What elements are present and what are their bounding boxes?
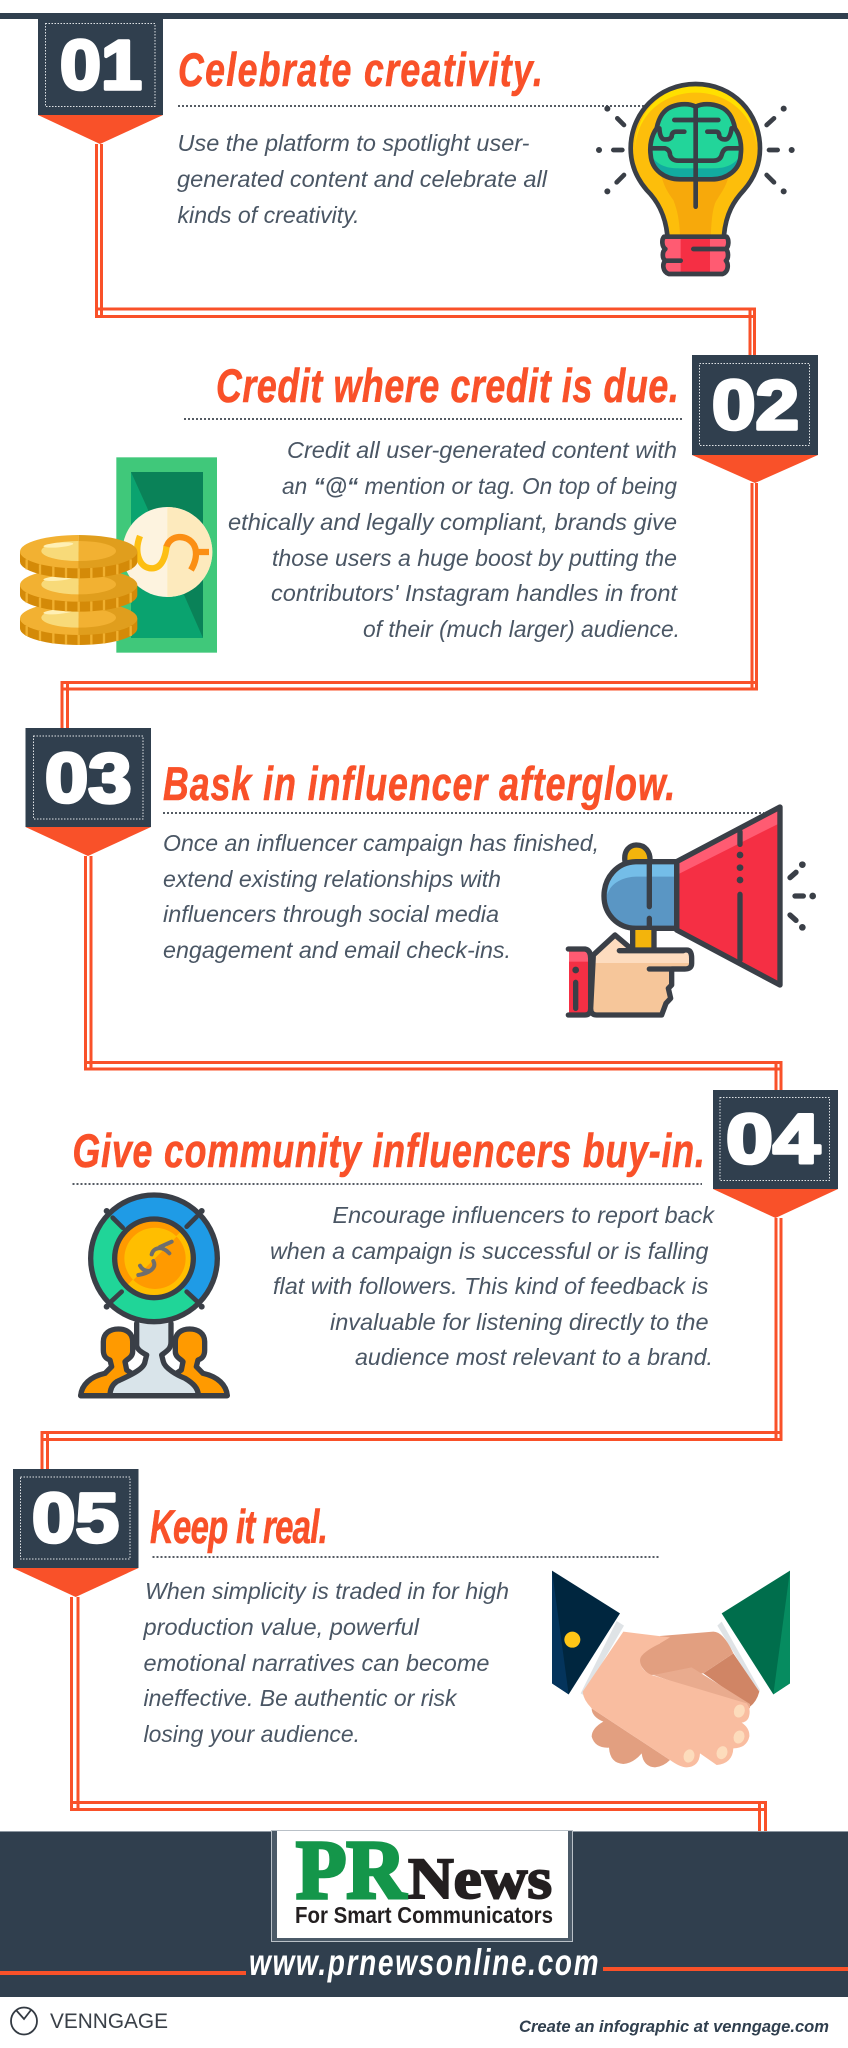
venngage logo <box>11 2008 168 2034</box>
heading: Celebrate creativity. <box>178 43 543 96</box>
number badge 03: 03 <box>45 739 132 817</box>
body text <box>177 130 548 228</box>
number badge 01 <box>38 19 163 144</box>
body text: influencers through social media <box>163 901 499 927</box>
number badge 02 <box>692 355 818 483</box>
logo: PR News: For Smart Communicators <box>295 1902 553 1928</box>
icon: light bulb with brain <box>599 84 792 274</box>
number badge 05 <box>13 1469 138 1597</box>
venngage credit: Create an infographic at venngage.com <box>519 2018 829 2036</box>
number badge 03 <box>26 728 151 856</box>
body text: kinds of creativity. <box>178 202 360 228</box>
body text: Once an influencer campaign has finished, <box>163 830 599 856</box>
logo: PR News: News <box>408 1846 552 1911</box>
body text: an “@“ mention or tag. On top of being <box>282 473 677 499</box>
body text: contributors' Instagram handles in front <box>271 580 679 606</box>
heading: Bask in influencer afterglow. <box>163 757 675 810</box>
body text <box>270 1202 716 1370</box>
body text <box>142 1578 509 1747</box>
body text: audience most relevant to a brand. <box>355 1344 713 1370</box>
number badge 04: 04 <box>726 1100 820 1178</box>
body text: Encourage influencers to report back <box>332 1202 716 1228</box>
icon: megaphone in hand <box>568 807 813 1015</box>
number badge 04 <box>713 1090 838 1218</box>
body text: when a campaign is successful or is falling <box>270 1238 709 1264</box>
body text: flat with followers. This kind of feedback is <box>273 1273 709 1299</box>
body text <box>163 830 599 963</box>
body text: generated content and celebrate all <box>177 166 548 192</box>
connector: step 5 to footer <box>70 1597 767 1831</box>
heading: Credit where credit is due. <box>216 359 679 412</box>
logo: PR News <box>272 1824 572 1942</box>
body text: When simplicity is traded in for high <box>145 1578 509 1604</box>
body text: invaluable for listening directly to the <box>330 1309 708 1335</box>
header bar <box>0 13 848 19</box>
panel: step 4 give community influencers buy-in <box>72 1090 838 1396</box>
heading: Keep it real. <box>150 1500 328 1553</box>
body text: those users a huge boost by putting the <box>272 545 677 571</box>
connector: step 1 to step 2 <box>95 144 756 355</box>
footer band <box>0 1824 848 1997</box>
connector: step 4 to step 5 <box>40 1218 782 1469</box>
body text <box>228 437 680 642</box>
number badge 05: 05 <box>32 1479 119 1557</box>
body text: losing your audience. <box>144 1721 360 1747</box>
body text: extend existing relationships with <box>163 866 501 892</box>
body text: ethically and legally compliant, brands give <box>228 509 677 535</box>
website url <box>0 1941 848 1983</box>
light rays <box>599 109 792 191</box>
heading: Give community influencers buy-in. <box>72 1124 705 1177</box>
body text: of their (much larger) audience. <box>363 616 680 642</box>
icon: handshake <box>552 1571 790 1767</box>
connector: step 2 to step 3 <box>60 483 758 728</box>
panel: step 3 bask in influencer afterglow <box>26 728 813 1015</box>
connector: step 3 to step 4 <box>84 856 782 1090</box>
website url: www.prnewsonline.com <box>249 1941 599 1983</box>
sound rays <box>790 865 813 927</box>
logo: PR News: PR <box>296 1824 407 1917</box>
icon: influencers under coin target <box>81 1195 227 1396</box>
body text: ineffective. Be authentic or risk <box>144 1685 458 1711</box>
body text: Use the platform to spotlight user- <box>178 130 530 156</box>
number badge 01: 01 <box>60 26 142 104</box>
venngage logo: VENNGAGE <box>50 2010 168 2033</box>
icon: banknote and coins <box>20 457 217 653</box>
panel: step 1 celebrate creativity <box>38 19 792 274</box>
panel: step 2 credit where credit is due <box>20 355 818 653</box>
body text: Credit all user-generated content with <box>287 437 677 463</box>
body text: engagement and email check-ins. <box>163 937 511 963</box>
panel: step 5 keep it real <box>13 1469 790 1767</box>
body text: emotional narratives can become <box>144 1650 490 1676</box>
number badge 02: 02 <box>712 366 799 444</box>
body text: production value, powerful <box>142 1614 420 1640</box>
